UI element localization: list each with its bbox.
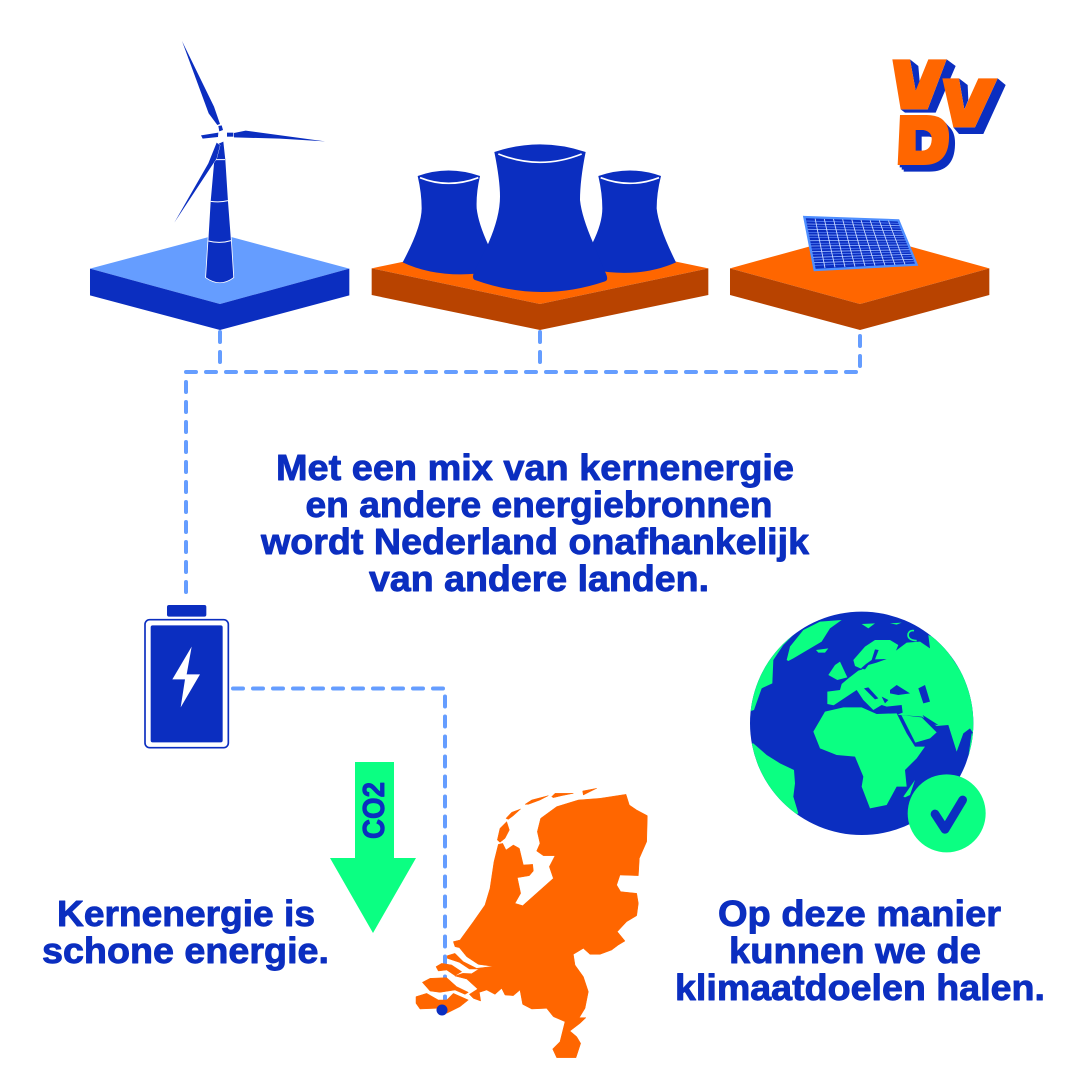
heading: main message: Met een mix van kernenergie [276, 447, 794, 488]
heading: main message: wordt Nederland onafhankelijk [260, 521, 810, 562]
icon: battery [145, 605, 228, 748]
icon: cooling towers on orange platform [372, 144, 708, 330]
logo: VVD [892, 59, 1006, 172]
text: clean energy: Kernenergie is [57, 893, 315, 934]
text: clean energy [42, 893, 329, 971]
map marker dot [436, 1004, 448, 1016]
heading: main message: en andere energiebronnen [306, 484, 772, 525]
icon: wind turbine on blue platform [90, 41, 349, 330]
heading: main message [260, 447, 810, 599]
map: the Netherlands [416, 788, 647, 1058]
arrow: CO2 down: CO2 [356, 782, 391, 839]
arrow: CO2 down [330, 762, 416, 933]
dashed connector: energy sources to battery [186, 332, 860, 594]
text: climate goals: Op deze manier [718, 893, 1001, 934]
icon: globe with check badge [743, 612, 986, 852]
text: clean energy: schone energie. [42, 930, 329, 971]
text: climate goals: kunnen we de [729, 930, 981, 971]
icon: solar panel on orange platform [730, 217, 989, 330]
text: climate goals [675, 893, 1045, 1008]
dashed connector: battery to Netherlands [233, 688, 445, 1006]
heading: main message: van andere landen. [369, 558, 709, 599]
text: climate goals: klimaatdoelen halen. [675, 967, 1045, 1008]
